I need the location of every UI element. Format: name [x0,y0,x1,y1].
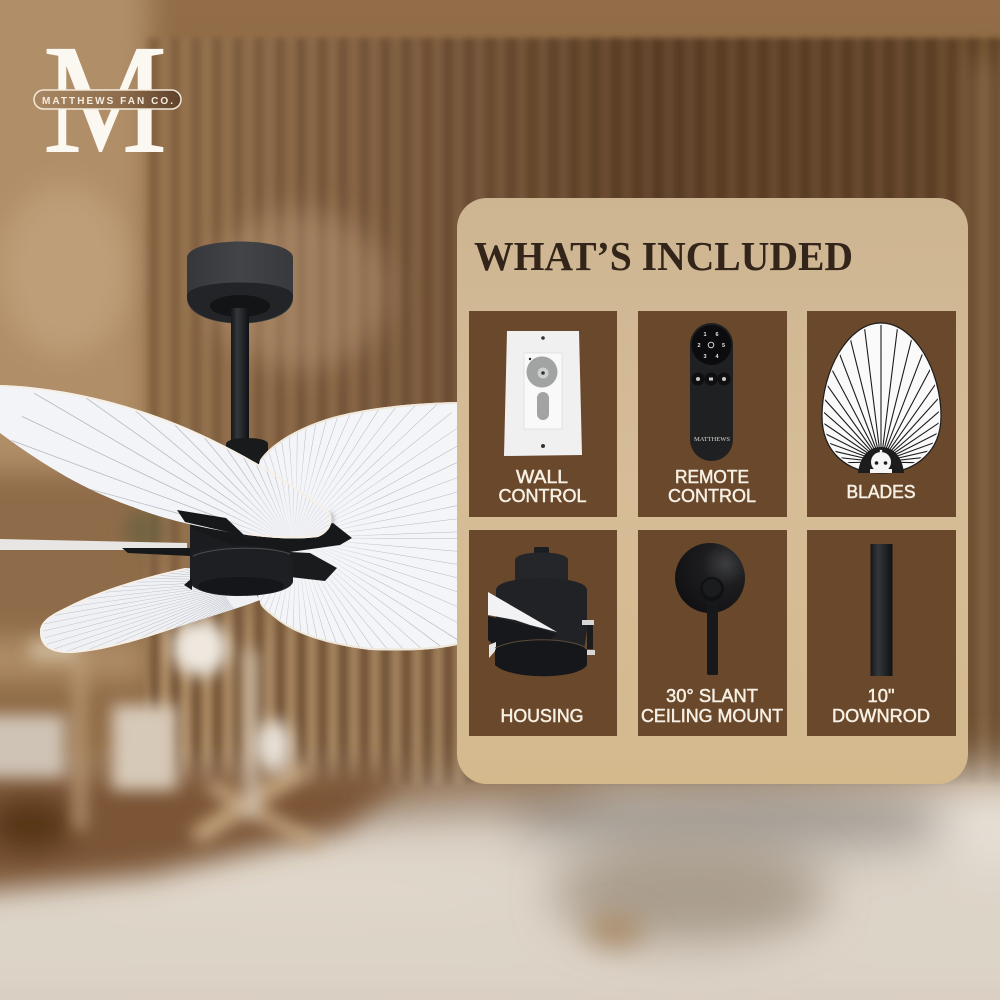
logo: Matthews Fan Co.: MATTHEWS FAN CO. [42,96,173,107]
panel: what's included [457,198,1000,784]
card: downrod [807,530,956,736]
fan left blade arm [122,548,190,556]
icon: downrod [870,544,892,676]
fan downrod [231,308,249,446]
label [498,467,586,506]
label: REMOTE [675,467,749,487]
icon: remote [690,323,733,461]
fan motor housing [184,546,293,596]
fan motor top [190,525,290,560]
fan bracket top [177,510,245,536]
label: CONTROL [498,486,586,506]
icon: remote: 2 [697,343,701,349]
label: 30° SLANT [666,686,758,706]
card: blades [807,311,956,517]
icon: remote: 1 [703,332,707,338]
icon: housing [488,547,595,676]
fan blade upper left [0,385,332,538]
fan canopy [187,242,293,324]
label: HOUSING [500,706,584,726]
icon: remote: 5 [722,343,725,349]
label: WALL [516,467,568,487]
label [832,686,930,726]
fan lower arm [290,552,337,581]
card: wall control [469,311,617,517]
icon: remote: 4 [715,354,719,360]
label [668,467,756,506]
fan collar [226,438,268,470]
icon: ceiling mount [675,543,745,675]
icon: remote: 6 [715,332,719,338]
label: DOWNROD [832,706,930,726]
fan blade right [258,402,457,650]
card: ceiling mount [638,530,787,736]
fan blade edge-on [0,539,187,550]
label [641,686,783,726]
icon: remote: MATTHEWS [694,436,730,443]
card: remote control [638,311,787,517]
heading: WHAT’S INCLUDED [474,233,853,279]
logo: Matthews Fan Co.: M [43,12,167,186]
fan blade lower left [40,568,260,653]
icon: wall control [504,331,582,456]
icon: remote: 3 [703,354,707,360]
label: CEILING MOUNT [641,706,783,726]
label: BLADES [846,482,916,502]
label: 10" [868,686,894,706]
icon: blade [821,322,942,474]
fan upper arm [177,510,352,552]
card: housing [469,530,617,736]
ceiling fan [0,242,457,653]
label: CONTROL [668,486,756,506]
